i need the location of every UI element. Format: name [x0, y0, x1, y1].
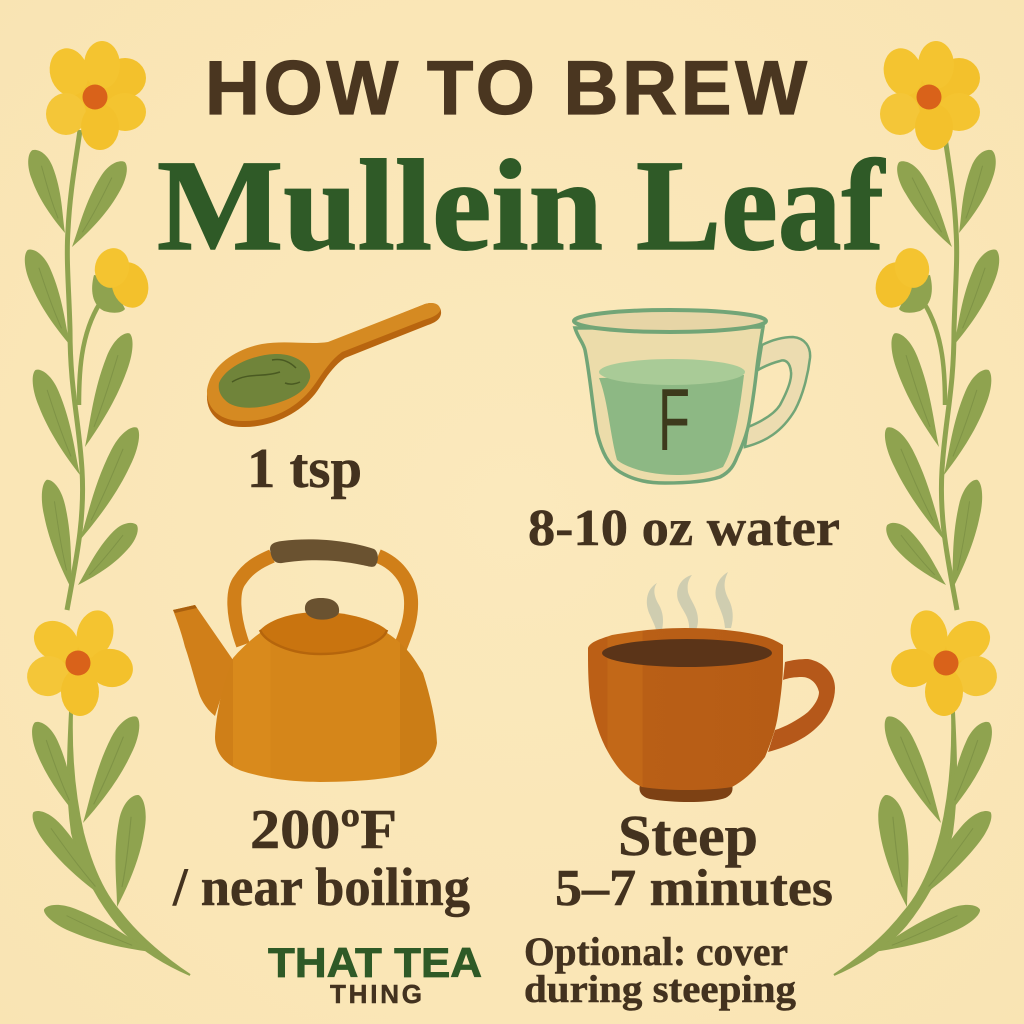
left bottom vine with flower [23, 606, 190, 975]
label: steep time: Steep [618, 803, 758, 868]
label: 1 tsp: 1 tsp [247, 438, 362, 500]
title: how to brew: HOW TO BREW [205, 46, 807, 131]
logo: that tea thing: THING [330, 979, 422, 1009]
label: water amount: 8-10 oz water [528, 500, 840, 557]
label: temperature: 200ºF [250, 799, 397, 861]
title: mullein leaf [157, 134, 886, 278]
label: temperature: / near boiling [172, 857, 470, 917]
note: optional cover: during steeping [524, 968, 797, 1011]
left top vine with flower and bud [18, 41, 153, 610]
icon: measuring cup with water [574, 310, 810, 483]
logo: that tea thing: THAT TEA [268, 939, 482, 986]
icon: cup of tea with steam [588, 572, 835, 802]
right bottom vine with flower [834, 606, 1001, 975]
icon: wooden spoon with leaf [207, 303, 441, 427]
right top vine with flower and bud [871, 41, 1006, 610]
note: optional cover: Optional: cover [524, 929, 788, 974]
label: steep time [555, 803, 833, 917]
label: steep time: 5–7 minutes [555, 860, 833, 917]
label: temperature [172, 799, 470, 917]
text: F marking: F [658, 370, 690, 469]
icon: orange kettle [173, 539, 437, 782]
title: mullein leaf: Leaf [636, 134, 886, 278]
note: optional cover [524, 929, 797, 1011]
title: mullein leaf: Mullein [157, 134, 603, 278]
logo: that tea thing [268, 939, 482, 1009]
